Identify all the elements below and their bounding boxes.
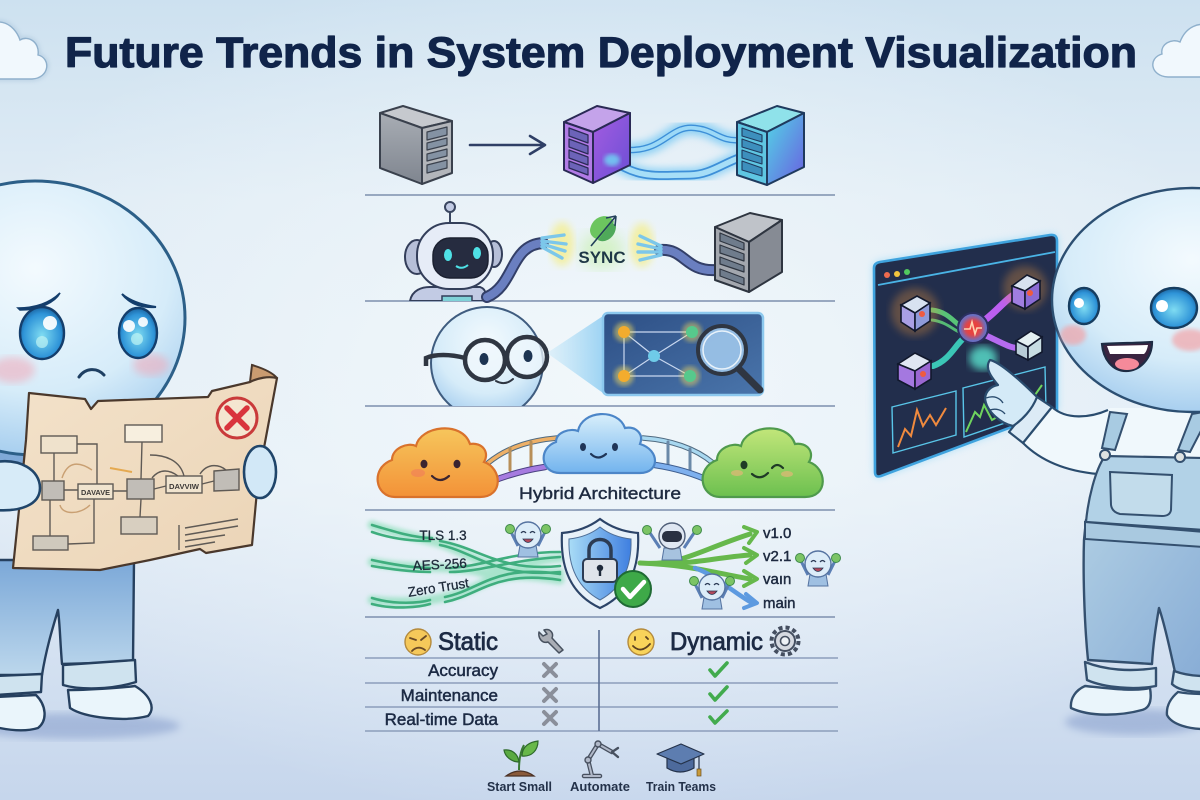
icon: shield with lock [562,519,651,608]
flowchart on map [33,425,239,550]
table rules [365,658,838,731]
label: Hybrid Architecture: Hybrid Architecture [519,484,681,503]
cross marks [544,664,556,724]
icon: sync [590,216,616,246]
bib pocket [1110,472,1172,516]
icon: robot arm [584,741,618,776]
icon: blue server [737,106,804,185]
ground shadow right [1065,709,1200,735]
label: Start Small: Start Small [487,780,552,794]
blue cloud [544,414,655,473]
recommendations footer [487,741,716,794]
icon: cloud top right [1153,25,1200,77]
icon: sprout [504,741,538,776]
row 5: security pipeline: Zero Trust [407,575,470,600]
mini robot [642,523,702,560]
row labels [385,661,499,729]
dashboard server nodes [891,266,1047,389]
paper map [13,365,277,570]
row 2: robot sync with server [405,202,782,304]
icon: smile emoji [628,629,654,655]
pointing hand [985,360,1052,443]
version labels: v1.0 [763,525,791,542]
check marks [710,663,727,723]
encrypted streams [372,525,560,607]
icon: gear [772,628,798,654]
mini character left [506,522,550,557]
dashboard connections [932,294,1018,366]
row 5: security pipeline: AES-256 [412,556,467,573]
character: happy figure pointing at dashboard [873,188,1200,735]
row 3: figure with glasses inspecting diagram [426,307,763,419]
legs and overalls right [1071,520,1200,729]
row 5: security pipeline [372,519,840,612]
release arrows [640,527,757,608]
label: SYNC: SYNC [578,248,626,267]
holographic dashboard [873,234,1058,477]
title: Future Trends in System Deployment Visualization [65,29,1137,77]
label: Train Teams: Train Teams [646,780,716,794]
heading: Dynamic: Dynamic [670,628,763,656]
ground shadow left [0,713,180,739]
character: worried figure with paper map [0,181,277,739]
mini characters right [796,551,840,586]
comparison table [365,628,838,731]
icon: graduation cap [657,744,704,776]
icon: wrench [539,630,563,653]
head right [1052,188,1200,412]
gaze beam [547,316,603,393]
glowing cables [612,128,742,176]
data cables and sync [550,222,574,266]
icon: server [715,213,782,292]
divider [365,195,835,617]
icon: robot [405,202,502,304]
waistband [1085,522,1200,547]
heading: Static: Static [438,628,498,656]
arm [1023,407,1200,474]
icon: grey legacy server [380,106,452,184]
orange cloud [378,428,498,497]
icon: magnifying glass [698,326,760,390]
row labels: Maintenance [401,686,498,705]
bib [1086,456,1200,530]
version labels: vaın [763,571,791,588]
dashboard line charts [892,367,1046,453]
shoulder left [0,410,25,510]
legs and overalls left [0,560,152,730]
overall straps [1100,412,1200,462]
paper map: DAVAVE [81,488,110,497]
icon: cloud top left [0,22,47,79]
row 4: hybrid architecture clouds [378,414,823,503]
stream labels: TLS 1.3 [419,528,467,543]
face left [0,293,169,383]
diagram panel [603,313,763,395]
bridges [488,438,713,482]
glasses [426,337,547,380]
row labels: Real-time Data [385,710,499,729]
face right [1060,288,1200,371]
row labels: Accuracy [428,661,498,680]
hands left [0,461,40,510]
icon: sad emoji [405,629,431,655]
label: Automate: Automate [570,780,630,794]
paper map: DAVVIW [169,482,200,491]
version labels: main [763,595,796,612]
version labels: v2.1 [763,548,791,565]
head left [0,181,185,455]
head with glasses [431,307,543,419]
version labels [763,525,796,612]
icon: purple server [564,106,630,183]
green cloud [703,428,823,497]
fingertip glow [969,346,997,370]
dashboard hub [958,313,988,343]
check badge [615,571,651,607]
icon: red X on map [217,398,257,438]
arrow [470,136,545,154]
row 1: server migration [380,106,804,185]
